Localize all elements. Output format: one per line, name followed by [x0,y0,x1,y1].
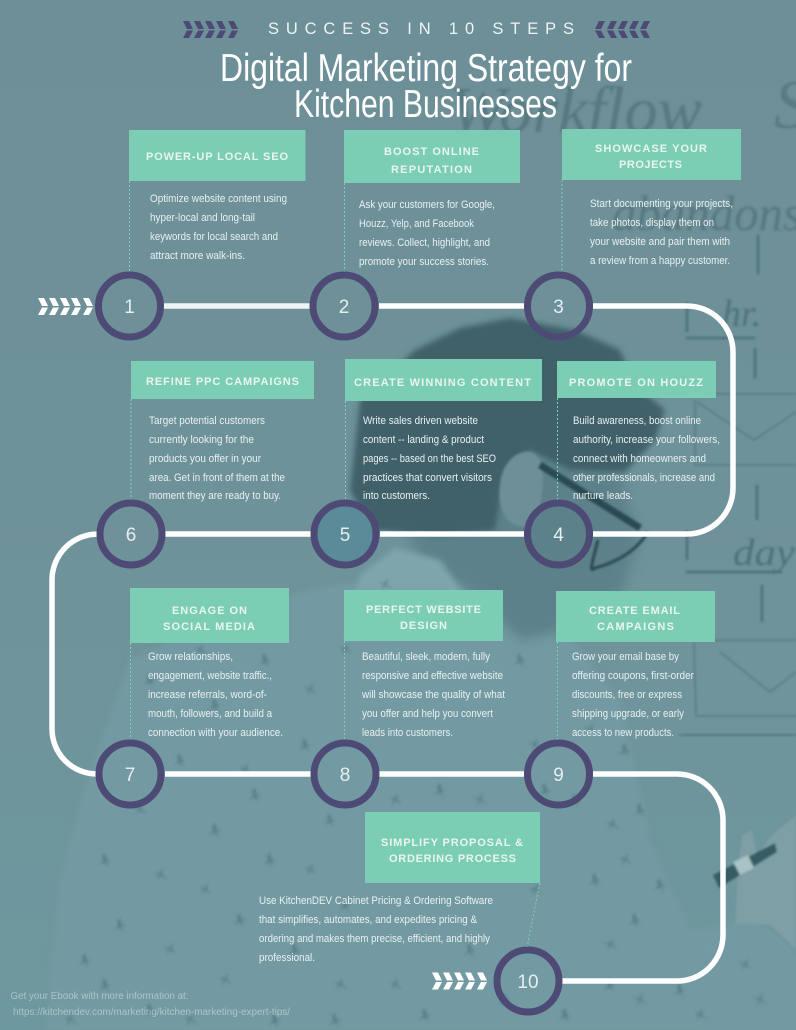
panel: step 3: take photos, display them on [590,217,714,229]
panel: step 3: Start documenting your projects, [590,198,733,210]
panel: step 4: Build awareness, boost online [573,415,701,427]
panel: step 10: ordering and makes them precise, efficient, and highly [259,933,490,945]
panel: step 9: 9 [553,765,564,786]
footer: ebook link: Get your Ebook with more information at: [10,990,188,1002]
whiteboard handwriting: day [733,532,795,574]
title [220,47,632,126]
panel: step 2: reviews. Collect, highlight, and [359,237,490,249]
panel: step 8: 8 [340,765,350,786]
panel: step 10: professional. [259,952,315,964]
panel: step 1: keywords for local search and [150,231,278,243]
panel: step 8: will showcase the quality of what [361,689,505,701]
panel: step 10: that simplifies, automates, and expedites pricing & [259,914,478,926]
panel: step 7 [99,588,289,805]
footer: ebook link: https://kitchendev.com/marketing/kitchen-marketing-expert-tips/ [13,1006,290,1018]
panel: step 9: CREATE EMAIL [589,605,680,617]
icon: end arrows [432,972,487,990]
panel: step 10 [259,812,559,1012]
panel: step 8: PERFECT WEBSITE [366,604,481,616]
icon: right chevrons [595,21,650,38]
panel: step 6: 6 [126,525,136,546]
panel: step 9: access to new products. [572,727,674,739]
panel: step 6 [100,361,314,565]
whiteboard handwriting: hr. [722,293,761,335]
panel: step 10: 10 [517,972,539,993]
panel: step 3: your website and pair them with [590,236,730,248]
panel: step 9: shipping upgrade, or early [572,708,684,720]
panel: step 3 [528,129,741,337]
glasses [540,465,648,570]
panel: step 1: POWER-UP LOCAL SEO [146,151,288,163]
panel: step 7: 7 [125,765,135,786]
panel: step 6: products you offer in your [149,453,261,465]
panel: step 6: Target potential customers [149,415,265,427]
title: Kitchen Businesses [294,83,557,126]
panel: step 9: discounts, free or express [572,689,682,701]
panel: step 7: ENGAGE ON [172,605,247,617]
panel: step 8: DESIGN [400,620,447,632]
panel: step 8 [314,590,505,805]
panel: step 10: SIMPLIFY PROPOSAL & [381,837,523,849]
panel: step 2: 2 [339,297,349,318]
panel: step 5: CREATE WINNING CONTENT [354,377,531,389]
panel: step 4: authority, increase your followers, [573,434,720,446]
panel: step 9: Grow your email base by [572,651,679,663]
panel: step 9 [528,591,715,805]
ear [500,452,543,527]
panel: step 6: currently looking for the [149,434,254,446]
panel: step 3: SHOWCASE YOUR [595,143,707,155]
panel: step 5: Write sales driven website [363,415,478,427]
neck and face [390,430,640,640]
panel: step 2: BOOST ONLINE [384,146,479,158]
panel: step 4: 4 [553,525,564,546]
panel: step 4: PROMOTE ON HOUZZ [569,377,703,389]
panel: step 5: content -- landing & product [363,434,484,446]
icon: start arrows [38,298,93,315]
header: success in 10 steps [183,20,650,38]
panel: step 4: nurture leads. [573,490,633,502]
panel: step 5: practices that convert visitors [363,472,492,484]
panel: step 2: REPUTATION [391,164,472,176]
panel: step 1: attract more walk-ins. [150,250,245,262]
panel: step 5: into customers. [363,490,430,502]
timeline path [52,306,733,981]
panel: step 10: Use KitchenDEV Cabinet Pricing & Ordering Software [259,895,493,907]
panel: step 2 [313,130,520,337]
panel: step 2: Houzz, Yelp, and Facebook [359,218,474,230]
panel: step 1: hyper-local and long-tail [150,212,255,224]
whiteboard handwriting: Workflow [450,74,702,147]
panel: step 8: responsive and effective website [362,670,503,682]
panel: step 9: CAMPAIGNS [597,621,674,633]
hair [350,318,665,535]
panel: step 5: 5 [340,525,350,546]
title: Digital Marketing Strategy for [220,47,632,90]
panel: step 4: other professionals, increase and [573,472,715,484]
panel: step 6: moment they are ready to buy. [149,490,281,502]
panel: step 1 [98,130,306,337]
panel: step 1: 1 [124,297,135,318]
panel: step 3: PROJECTS [619,159,682,171]
panel: step 10: ORDERING PROCESS [389,853,516,865]
panel: step 6: area. Get in front of them at the [149,472,285,484]
panel: step 1: Optimize website content using [150,193,287,205]
panel: step 6: REFINE PPC CAMPAIGNS [146,376,299,388]
panel: step 5: pages -- based on the best SEO [363,453,496,465]
panel: step 3: 3 [553,297,564,318]
shirt [45,570,796,1030]
panel: step 7: connection with your audience. [148,727,283,739]
panel: step 2: promote your success stories. [359,256,489,268]
panel: step 8: leads into customers. [362,727,453,739]
panel: step 9: offering coupons, first-order [572,670,694,682]
panel: step 4: connect with homeowners and [573,453,706,465]
whiteboard handwriting [450,67,796,735]
panel: step 7: engagement, website traffic., [148,670,272,682]
panel: step 7: SOCIAL MEDIA [163,621,255,633]
panel: step 8: Beautiful, sleek, modern, fully [362,651,490,663]
kicker text: SUCCESS IN 10 STEPS [268,20,574,38]
panel: step 7: increase referrals, word-of- [148,689,267,701]
panel: step 7: mouth, followers, and build a [148,708,273,720]
hand with marker [700,815,796,1030]
footer: ebook link [10,990,290,1018]
panel: step 2: Ask your customers for Google, [359,199,495,211]
panel: step 7: Grow relationships, [148,651,233,663]
panel: step 4 [528,361,720,565]
panel: step 5 [314,359,542,565]
panel: step 8: you offer and help you convert [362,708,493,720]
panel: step 3: a review from a happy customer. [590,255,730,267]
icon: left chevrons [183,21,238,38]
shirt print [64,578,767,1027]
